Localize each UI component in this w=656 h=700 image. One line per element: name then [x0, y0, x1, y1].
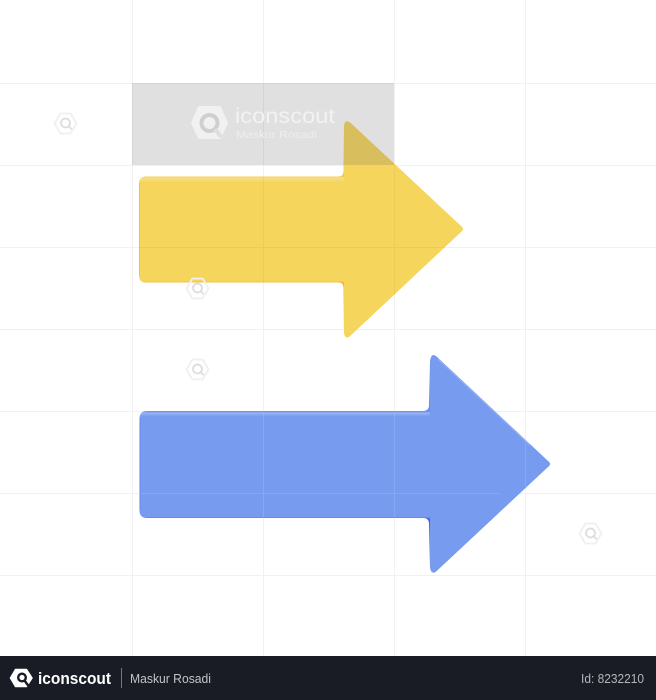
blue arrow — [140, 355, 550, 573]
icon: iconscout logo — [10, 670, 32, 686]
footer id: Id: 8232210 — [581, 672, 644, 686]
grid lines over yellow arrow — [139, 165, 445, 295]
footer author: Maskur Rosadi — [130, 672, 211, 686]
icon: small watermark under yellow arrow — [187, 279, 208, 298]
yellow arrow — [139, 121, 463, 338]
footer bar — [0, 656, 656, 700]
grid lines over blue arrow — [140, 412, 526, 518]
icon: small watermark right — [580, 524, 601, 543]
icon: small watermark top left — [55, 114, 76, 133]
watermark grey panel — [132, 83, 394, 165]
icon: small watermark above blue arrow — [187, 360, 208, 379]
watermark author: Maskur Rosadi — [236, 129, 317, 141]
footer brand name: iconscout — [38, 669, 111, 688]
icon: iconscout hexagon — [192, 107, 227, 138]
watermark brand name: iconscout — [235, 105, 335, 128]
